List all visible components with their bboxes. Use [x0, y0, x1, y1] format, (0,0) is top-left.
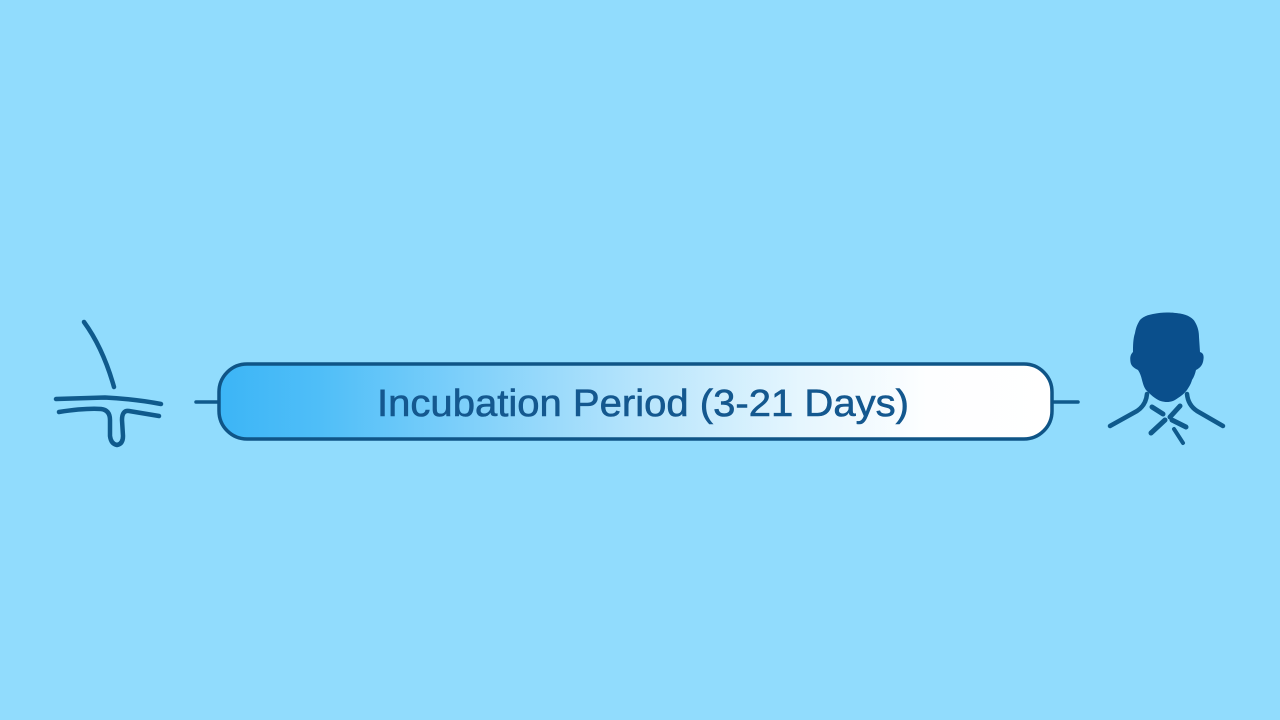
bar label: Incubation Period (3-21 Days) [377, 383, 909, 425]
icon: hair on skin with follicle [56, 322, 161, 445]
head silhouette [1130, 312, 1204, 402]
icon: head and neck with swollen throat [1110, 312, 1223, 443]
throat inflammation marks [1151, 406, 1186, 443]
right connector line [1053, 400, 1078, 404]
progress bar: incubation period [219, 364, 1052, 439]
left connector line [196, 400, 219, 404]
neck and shoulder lines [1110, 394, 1223, 426]
